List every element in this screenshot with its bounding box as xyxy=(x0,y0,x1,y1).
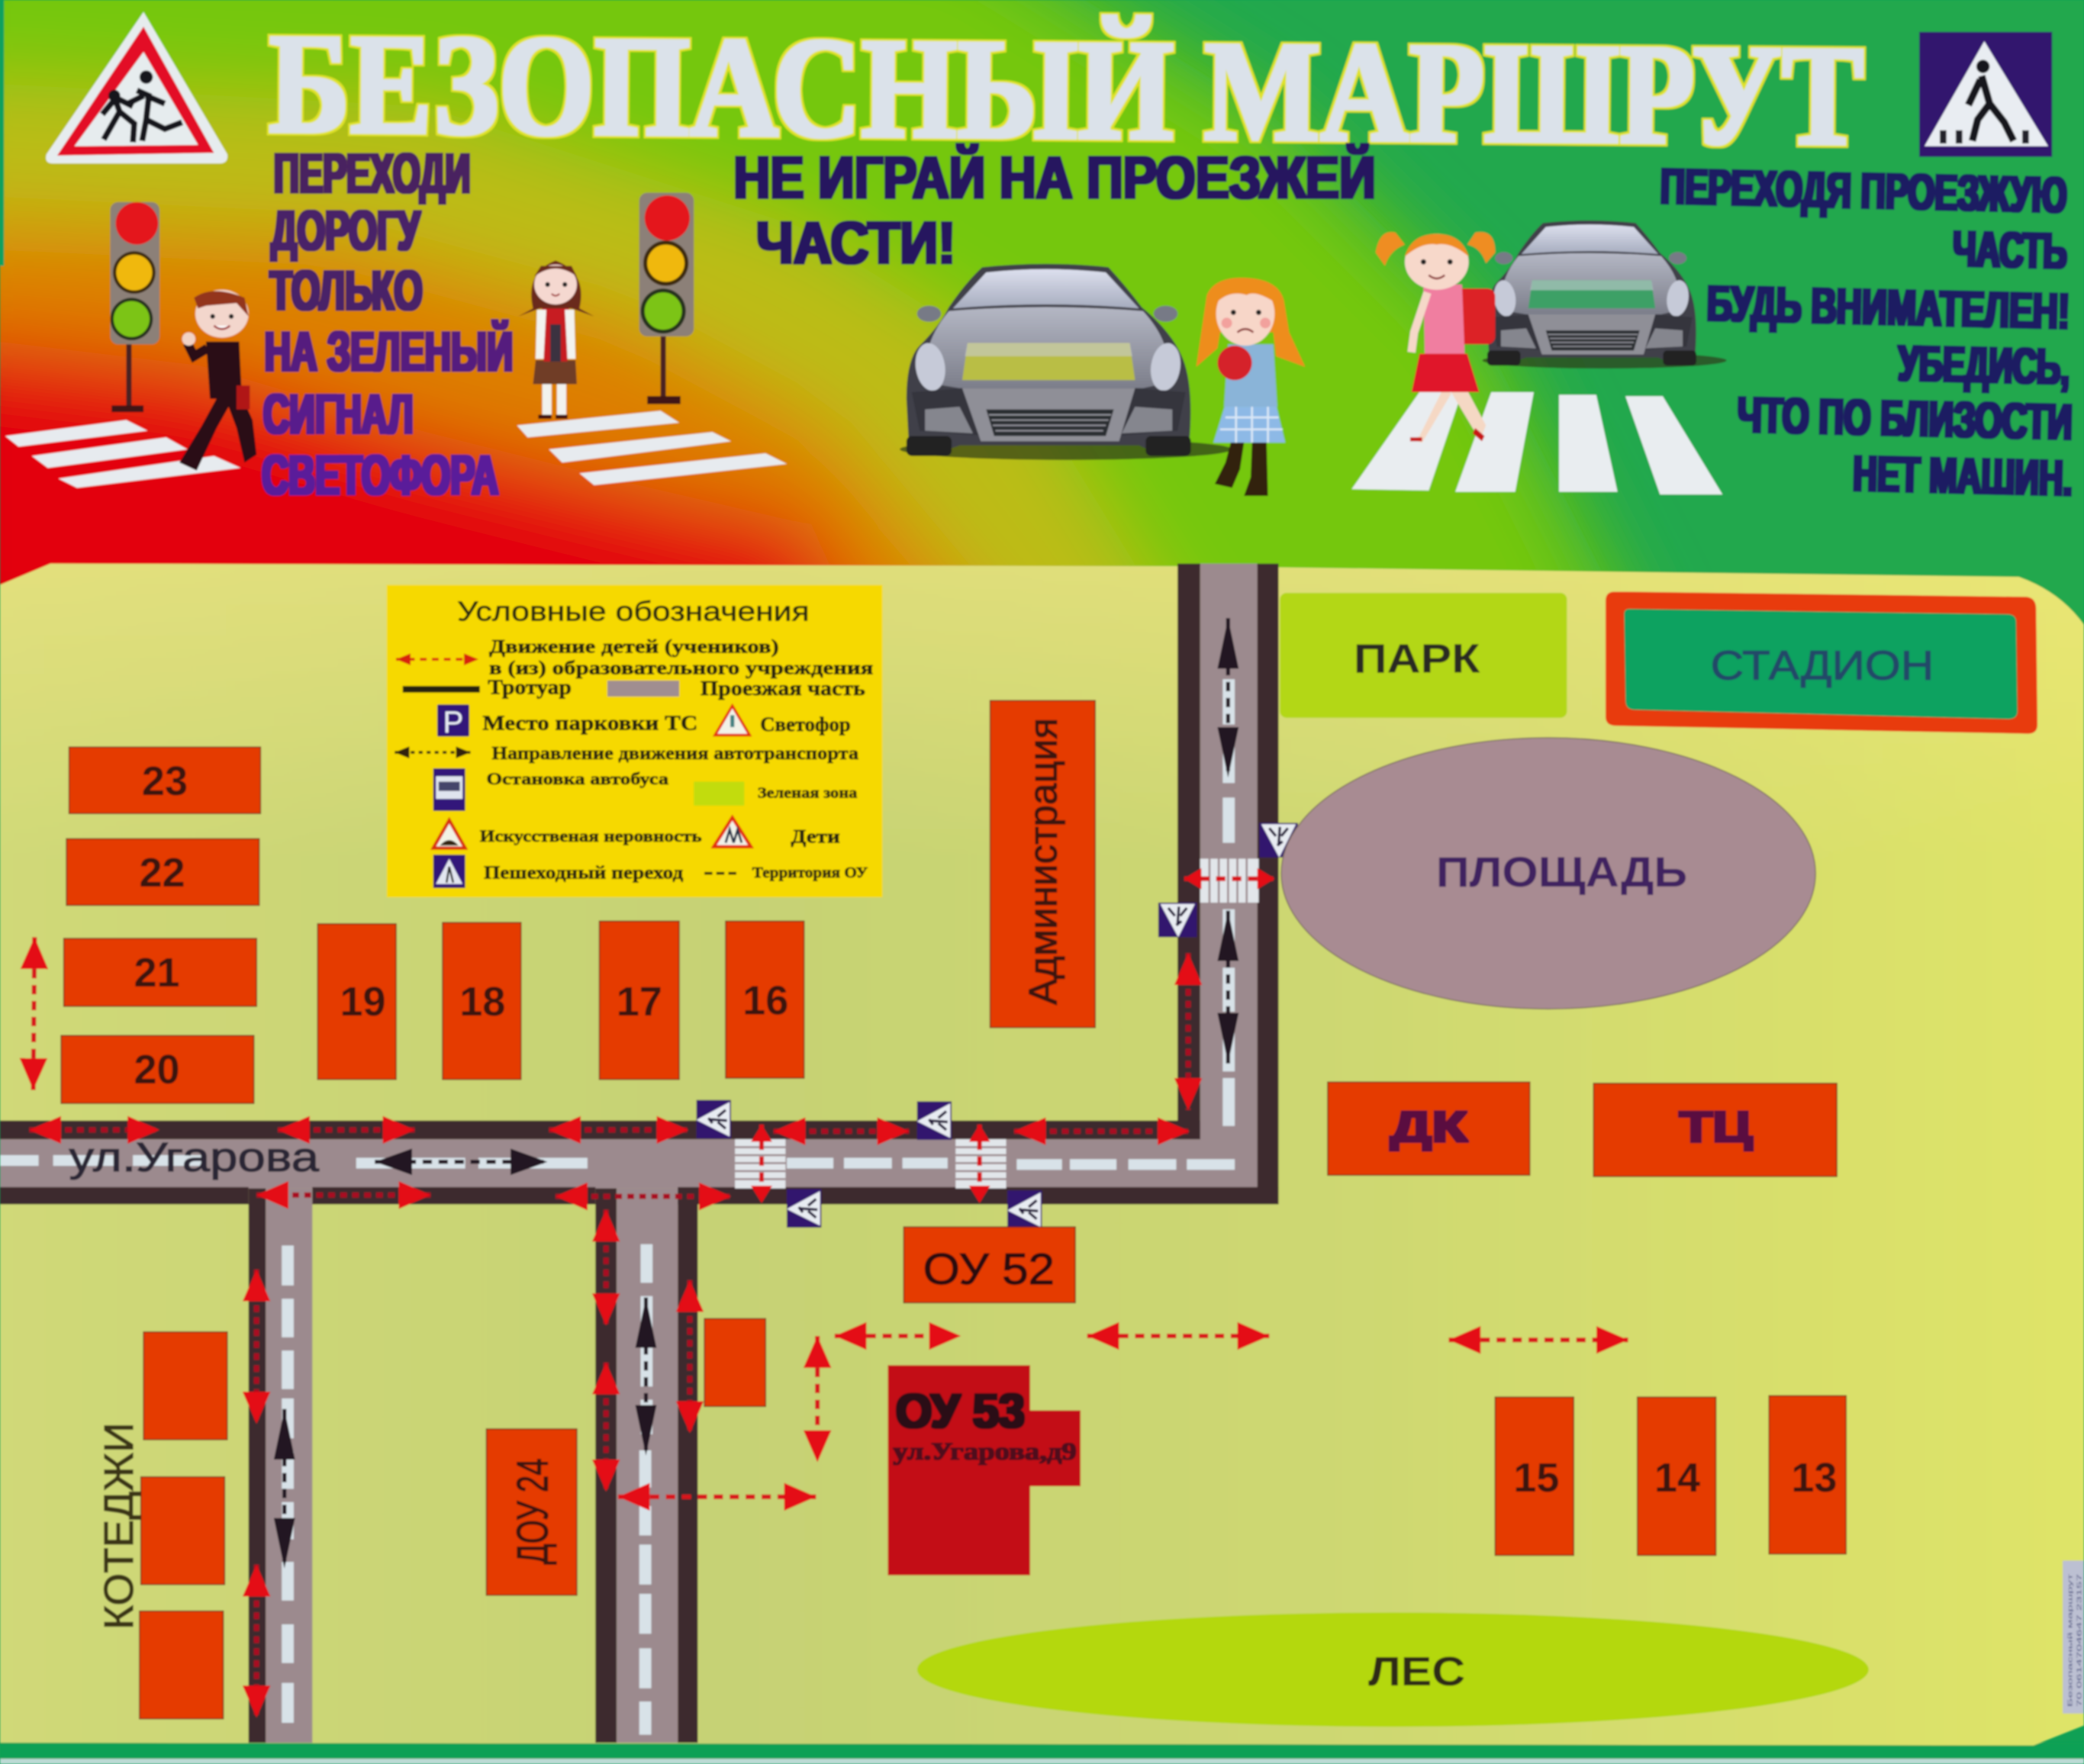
buildings xyxy=(61,700,1846,1719)
building: Администрация xyxy=(990,700,1095,1028)
legend: school territory: Территория ОУ xyxy=(752,864,868,881)
arrows: traffic direction xyxy=(285,618,1228,1569)
building 13: 13 xyxy=(1791,1455,1837,1501)
icon: right car xyxy=(1483,220,1727,369)
zone: square xyxy=(1281,738,1815,1009)
building 15: 15 xyxy=(1513,1455,1559,1501)
building: ОУ 53 xyxy=(887,1365,1081,1576)
bottom border strip xyxy=(0,1743,2084,1764)
zone: stadium xyxy=(1606,591,2037,734)
legend: traffic light sign xyxy=(715,706,851,736)
title: БЕЗОПАСНЫЙ МАРШРУТ xyxy=(269,3,1864,175)
slogan: left: ТОЛЬКО xyxy=(270,259,423,322)
legend: children route xyxy=(396,636,873,678)
legend: bus stop: Остановка автобуса xyxy=(486,769,668,788)
building 21: 21 xyxy=(134,950,180,996)
building 23 xyxy=(69,747,260,813)
road: northern street carriageway xyxy=(1200,564,1258,1189)
building: Администрация: Администрация xyxy=(1022,718,1066,1005)
buildings: cottages xyxy=(140,1332,227,1719)
building: ОУ 53: ул.Угарова,д9 xyxy=(893,1438,1077,1466)
building: ОУ 52: ОУ 52 xyxy=(923,1245,1055,1294)
zone: stadium: СТАДИОН xyxy=(1711,642,1934,688)
legend: sidewalk xyxy=(403,675,572,699)
building 22 xyxy=(66,839,259,905)
building 17 xyxy=(600,921,679,1080)
building: ДК xyxy=(1328,1082,1530,1175)
zone: forest xyxy=(917,1612,1869,1727)
slogan: centre xyxy=(733,144,1376,276)
crosswalk: near ОУ 52 xyxy=(955,1139,1006,1189)
sidewalk: bottom segments of ул. Угарова xyxy=(0,1187,1279,1205)
crosswalk: near administration xyxy=(735,1139,785,1189)
road network xyxy=(0,564,1279,1743)
building 23: 23 xyxy=(142,758,188,804)
building: ОУ 52 xyxy=(903,1227,1075,1302)
sidewalk: north street right xyxy=(1258,564,1279,1205)
building 20: 20 xyxy=(134,1047,180,1093)
slogan: left xyxy=(262,143,513,507)
building: ОУ 53: ОУ 53 xyxy=(896,1385,1025,1438)
sticker: manufacturer label: Безопасный маршрут xyxy=(2066,1574,2073,1707)
icon: boy walking xyxy=(179,290,256,471)
building 13 xyxy=(1769,1395,1846,1554)
legend: children route: Движение детей (учеников) xyxy=(489,636,779,657)
road: central street xyxy=(595,1189,697,1743)
signs: pedestrian crossing on map xyxy=(697,822,1298,1229)
building 18: 18 xyxy=(459,979,505,1025)
legend: speed bump xyxy=(433,820,702,848)
slogan: left: ДОРОГУ xyxy=(271,200,420,262)
zone: forest: ЛЕС xyxy=(1368,1649,1465,1695)
sticker: manufacturer label xyxy=(2063,1560,2084,1714)
legend: pedestrian crossing xyxy=(433,855,684,888)
legend title: Условные обозначения xyxy=(457,596,810,627)
building 19 xyxy=(317,924,396,1080)
legend: parking: P xyxy=(443,706,463,739)
icon: girl with backpack xyxy=(1376,232,1495,443)
building: unnamed annex xyxy=(704,1318,765,1406)
legend: carriageway: Проезжая часть xyxy=(701,677,865,700)
building 15 xyxy=(1495,1397,1573,1555)
sidewalk: north street left xyxy=(1177,564,1200,1139)
road: ул. Угарова carriageway xyxy=(0,1139,1258,1189)
slogan: centre: ЧАСТИ! xyxy=(756,209,955,276)
building: ДК: ДК xyxy=(1390,1103,1468,1152)
icon: left zebra crossing xyxy=(5,420,240,488)
arrows: children movement on sidewalks xyxy=(29,953,1190,1717)
legend: speed bump: Искусственая неровность xyxy=(480,827,702,845)
legend: traffic light sign: Светофор xyxy=(760,713,851,736)
legend: sidewalk: Тротуар xyxy=(488,675,572,699)
building 22: 22 xyxy=(139,850,185,896)
slogan: left: СВЕТОФОРА xyxy=(262,444,498,507)
icon: zebra crossing in perspective xyxy=(1351,392,1722,494)
icon: left car xyxy=(900,264,1232,460)
legend xyxy=(387,585,882,897)
icon: left traffic light xyxy=(111,202,159,412)
slogan: centre: НЕ ИГРАЙ НА ПРОЕЗЖЕЙ xyxy=(733,144,1376,211)
legend: bus stop xyxy=(433,768,668,811)
street label: ул.Угарова xyxy=(69,1135,320,1180)
arrows: children movement across open ground xyxy=(34,879,1628,1497)
legend: children route: в (из) образовательного учреждения xyxy=(489,657,873,678)
building 14 xyxy=(1638,1397,1716,1555)
building 20 xyxy=(61,1035,254,1103)
building 19: 19 xyxy=(340,979,386,1025)
building: ТЦ xyxy=(1593,1083,1837,1177)
legend: children sign: Дети xyxy=(791,826,840,848)
slogan: right xyxy=(1660,159,2073,507)
slogan: left: НА ЗЕЛЕНЫЙ xyxy=(265,320,513,383)
building: ТЦ: ТЦ xyxy=(1680,1103,1752,1152)
legend: carriageway xyxy=(607,677,865,700)
legend: parking: Место парковки ТС xyxy=(482,712,697,736)
building 16: 16 xyxy=(742,977,788,1023)
icon: right traffic light xyxy=(639,193,694,404)
legend: parking xyxy=(437,704,697,739)
crosswalk: north street xyxy=(1200,859,1258,903)
road lane markings xyxy=(0,649,1235,1735)
panel: map xyxy=(0,564,2084,1746)
icon: right zebra crossing xyxy=(517,410,787,485)
zone: park: ПАРК xyxy=(1354,636,1481,682)
building 18 xyxy=(443,922,521,1080)
building 17: 17 xyxy=(617,979,662,1025)
building: ДОУ 24: ДОУ 24 xyxy=(509,1458,558,1565)
legend: green zone xyxy=(694,781,857,806)
legend: traffic direction: Направление движения автотранспорта xyxy=(491,743,858,764)
legend: pedestrian crossing: Пешеходный переход xyxy=(484,863,684,884)
building 16 xyxy=(726,921,804,1078)
sidewalk: top of ул. Угарова xyxy=(0,1121,1200,1139)
legend: children sign xyxy=(713,817,840,848)
sticker: manufacturer label: 70 0614704647 23157 xyxy=(2076,1574,2083,1707)
label: cottages: КОТЕДЖИ xyxy=(96,1422,142,1630)
zone: square: ПЛОЩАДЬ xyxy=(1436,848,1687,896)
icon: girl standing xyxy=(518,260,594,419)
icon: pedestrian crossing sign xyxy=(1919,32,2052,157)
zone: park xyxy=(1280,593,1567,718)
slogan: left: ПЕРЕХОДИ xyxy=(274,143,471,205)
building 21 xyxy=(64,938,256,1006)
icon: children warning sign xyxy=(46,12,227,163)
slogan: left: СИГНАЛ xyxy=(263,383,414,446)
road: western street xyxy=(249,1189,312,1743)
legend: green zone: Зеленая зона xyxy=(758,784,857,801)
building: ДОУ 24 xyxy=(486,1429,577,1595)
building 14: 14 xyxy=(1654,1455,1700,1501)
banner: gradient background xyxy=(0,0,2084,665)
icon: girl with ball xyxy=(1197,278,1305,496)
